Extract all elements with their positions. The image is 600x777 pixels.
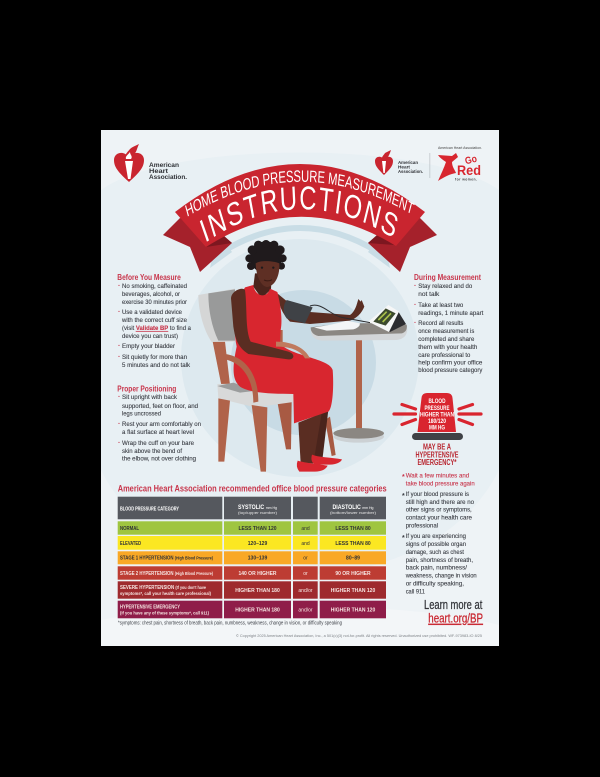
- table header row: (bottom/lower number): [330, 510, 377, 515]
- text block: emergency steps: pain, shortness of breath,: [406, 557, 473, 564]
- bullet list: during measurement: ·: [414, 302, 416, 309]
- call to action: learn more: [424, 598, 483, 626]
- neck and head: [253, 273, 272, 298]
- siren text: HIGHER THAN: [420, 411, 454, 418]
- logo: Go Red for Women: American Heart Association.: [438, 146, 482, 150]
- text block: during measurement: [414, 273, 484, 374]
- copyright line: © Copyright 2025 American Heart Association, Inc., a 501(c)(3) not-for-profit. All rights reserved. Unauthorized use prohibited. WF-973983-IO 8/25: [236, 634, 482, 638]
- bullet list: during measurement: ·: [414, 320, 416, 327]
- row: stage 1 hypertension: [118, 551, 386, 564]
- bullet list: during measurement: care professional to: [418, 352, 471, 359]
- row: elevated: and: [301, 541, 310, 547]
- text block: emergency steps: take blood pressure again: [406, 480, 475, 487]
- siren rays: [394, 404, 481, 424]
- bullet list: during measurement: not talk: [418, 291, 440, 298]
- bullet list: during measurement: readings, 1 minute apart: [418, 310, 484, 317]
- far arm: [277, 293, 364, 324]
- row: stage 2 hypertension: 140 OR HIGHER: [238, 571, 277, 577]
- logo: Go Red for Women: Red: [457, 163, 481, 178]
- row: normal: and: [301, 526, 310, 532]
- bullet list: proper positioning: skin above the bend of: [122, 448, 182, 455]
- table header row: DIASTOLIC mm Hg: [332, 505, 374, 511]
- logo: American Heart Association: American: [149, 162, 179, 169]
- banner body: [175, 164, 425, 247]
- row: severe hypertension: and/or: [298, 588, 313, 594]
- bullet list: proper positioning: a flat surface at heart level: [122, 429, 194, 436]
- text block: emergency steps: [402, 472, 477, 595]
- text block: emergency steps: signs of possible organ: [406, 541, 466, 548]
- callout: may be a hypertensive emergency: HYPERTENSIVE: [416, 450, 459, 459]
- bullet list: proper positioning: Wrap the cuff on your bare: [122, 440, 194, 447]
- heading: proper positioning: Proper Positioning: [117, 385, 176, 394]
- bullet list: before you measure: exercise 30 minutes prior: [122, 299, 188, 306]
- row: severe hypertension: symptoms*, call your health care professional): [120, 591, 212, 596]
- row: normal: LESS THAN 120: [238, 526, 277, 532]
- text block: emergency steps: professional: [406, 523, 438, 530]
- row: hypertensive emergency: HIGHER THAN 120: [331, 608, 375, 614]
- text block: emergency steps: *: [402, 493, 405, 500]
- bullet list: before you measure: ·: [118, 343, 120, 350]
- text block: emergency steps: If your blood pressure is: [406, 491, 469, 498]
- text block: emergency steps: damage, such as chest: [406, 549, 464, 556]
- row: elevated: LESS THAN 80: [335, 541, 371, 547]
- text block: emergency steps: back pain, numbness/: [406, 565, 467, 572]
- siren text: PRESSURE: [424, 405, 450, 412]
- bullet list: during measurement: Stay relaxed and do: [418, 283, 473, 290]
- row: elevated: ELEVATED: [120, 541, 141, 547]
- bullet list: before you measure: Empty your bladder: [122, 343, 176, 350]
- blood pressure monitor: [368, 305, 406, 332]
- logo: Go Red for Women: [430, 146, 482, 182]
- text block: emergency steps: call 911: [406, 588, 425, 595]
- row: hypertensive emergency: (If you have any of these symptoms*, call 911): [120, 610, 210, 615]
- row: normal: NORMAL: [120, 526, 139, 532]
- row: severe hypertension: HIGHER THAN 180: [235, 588, 280, 594]
- banner subtitle: HOME BLOOD PRESSURE MEASUREMENT: [185, 170, 415, 216]
- text block: emergency steps: or difficulty speaking,: [406, 580, 464, 587]
- table header row: [118, 497, 386, 519]
- bullet list: during measurement: once measurement is: [418, 328, 474, 335]
- bullet list: proper positioning: ·: [118, 421, 120, 428]
- bullet list: during measurement: completed and share: [418, 336, 475, 343]
- text block: before you measure: [117, 273, 191, 369]
- banner tails: [163, 218, 437, 272]
- siren dome: [418, 393, 456, 432]
- bullet list: proper positioning: supported, feet on floor, and: [122, 403, 198, 410]
- table heading: American Heart Association recommended office blood pressure categories: [118, 484, 387, 495]
- dress: [234, 285, 333, 423]
- table header row: (top/upper number): [238, 510, 278, 515]
- siren text: MM HG: [429, 424, 445, 431]
- row: stage 1 hypertension: STAGE 1 HYPERTENSION (High Blood Pressure): [120, 556, 214, 562]
- chair: [198, 289, 336, 472]
- illustration: seated woman measuring blood pressure: [198, 240, 407, 472]
- row: stage 2 hypertension: or: [303, 571, 308, 577]
- row: severe hypertension: [118, 581, 386, 599]
- heading: during measurement: During Measurement: [414, 273, 481, 282]
- row: stage 2 hypertension: 90 OR HIGHER: [335, 571, 371, 577]
- bullet list: proper positioning: the elbow, not over clothing: [122, 456, 196, 462]
- text block: emergency steps: If you are experiencing: [406, 533, 466, 540]
- bullet list: before you measure: device you can trust): [122, 333, 178, 340]
- row: hypertensive emergency: and/or: [298, 608, 313, 614]
- logo: American Heart Association small: Association.: [398, 169, 423, 174]
- table header row: BLOOD PRESSURE CATEGORY: [120, 506, 179, 512]
- text block: emergency steps: *: [402, 474, 405, 481]
- logo: Go Red for Women: Go: [464, 154, 478, 167]
- poster panel: [101, 130, 499, 646]
- bullet list: before you measure: ·: [118, 354, 120, 361]
- text block: emergency steps: contact your health care: [406, 515, 472, 522]
- text block: emergency steps: weakness, change in vision: [405, 573, 477, 580]
- row: normal: [118, 521, 386, 535]
- siren text: BLOOD: [428, 398, 446, 405]
- row: normal: LESS THAN 80: [335, 526, 371, 532]
- title banner: [163, 164, 437, 272]
- row: stage 2 hypertension: [118, 566, 386, 580]
- bullet list: proper positioning: ·: [118, 440, 120, 447]
- callout: may be a hypertensive emergency: MAY BE A: [423, 442, 451, 452]
- bullet list: before you measure: with the correct cuff size: [121, 317, 187, 324]
- bullet list: proper positioning: Sit upright with back: [122, 394, 178, 401]
- bullet list: before you measure: Use a validated device: [122, 309, 182, 316]
- bullet list: during measurement: ·: [414, 283, 416, 290]
- banner title: INSTRUCTIONS: [200, 186, 398, 242]
- backdrop circle: [231, 290, 376, 435]
- blood pressure category table: [118, 497, 386, 618]
- near arm: [231, 289, 293, 359]
- bullet list: during measurement: help confirm your office: [418, 360, 483, 366]
- row: stage 2 hypertension: STAGE 2 HYPERTENSION (High Blood Pressure): [120, 571, 214, 577]
- bullet list: before you measure: beverages, alcohol, or: [122, 291, 181, 298]
- cuff and tube: [284, 300, 313, 323]
- row: stage 1 hypertension: 130–139: [248, 556, 267, 562]
- text block: proper positioning: [117, 385, 201, 462]
- bullet list: before you measure: (visit Validate BP to find a: [122, 325, 191, 332]
- bullet list: before you measure: ·: [118, 309, 120, 316]
- logo: American Heart Association: Heart: [149, 168, 169, 175]
- legs and shoes: [313, 410, 328, 457]
- text block: emergency steps: Wait a few minutes and: [406, 472, 470, 479]
- hair: [245, 240, 287, 273]
- call to action: learn more: Learn more at: [424, 598, 483, 612]
- bullet list: proper positioning: Rest your arm comfortably on: [122, 421, 201, 428]
- siren base: [412, 433, 463, 440]
- bullet list: proper positioning: [118, 394, 201, 462]
- bullet list: during measurement: Record all results: [418, 320, 463, 327]
- call to action: learn more: heart.org/BP: [428, 612, 483, 626]
- bullet list: before you measure: Sit quietly for more than: [122, 354, 187, 361]
- bullet list: before you measure: No smoking, caffeinated: [122, 283, 187, 290]
- row: hypertensive emergency: HIGHER THAN 180: [235, 608, 280, 614]
- bullet list: before you measure: [118, 283, 191, 369]
- bullet list: during measurement: [414, 283, 484, 374]
- face: [256, 261, 279, 287]
- siren text: 180/120: [428, 418, 446, 425]
- logo: Go Red for Women: for women.: [455, 178, 477, 182]
- row: elevated: [118, 536, 386, 550]
- bullet list: proper positioning: legs uncrossed: [122, 410, 161, 418]
- callout: may be a hypertensive emergency: [416, 442, 459, 467]
- table header row: SYSTOLIC mm Hg: [238, 505, 277, 511]
- callout: may be a hypertensive emergency: EMERGENCY*: [418, 458, 457, 467]
- row: hypertensive emergency: [118, 601, 386, 618]
- table: [311, 321, 407, 443]
- text block: emergency steps: still high and there are no: [406, 499, 474, 506]
- row: hypertensive emergency: HYPERTENSIVE EMERGENCY: [120, 604, 181, 610]
- text block: emergency steps: *: [402, 535, 405, 542]
- logo: American Heart Association: Association.: [149, 174, 187, 181]
- logo: American Heart Association small: [375, 150, 423, 175]
- bullet list: before you measure: 5 minutes and do not talk: [122, 362, 191, 369]
- heading: before you measure: Before You Measure: [117, 273, 181, 282]
- logo: American Heart Association small: Heart: [398, 164, 411, 170]
- row: elevated: 120–129: [248, 541, 267, 547]
- bullet list: during measurement: Take at least two: [418, 302, 464, 309]
- logo: American Heart Association small: American: [398, 160, 418, 165]
- row: stage 1 hypertension: or: [303, 556, 308, 562]
- footnote: symptoms: *symptoms: chest pain, shortness of breath, back pain, numbness, weakness, change in vision, or difficulty speaking: [118, 620, 342, 626]
- bullet list: before you measure: ·: [118, 283, 120, 290]
- bullet list: during measurement: blood pressure category: [418, 367, 483, 374]
- armrest: [276, 342, 310, 358]
- woman: [225, 240, 370, 472]
- bullet list: during measurement: them with your health: [418, 344, 478, 351]
- siren text: [420, 398, 454, 431]
- row: stage 1 hypertension: 80–89: [346, 556, 360, 562]
- bullet list: proper positioning: ·: [118, 394, 120, 401]
- row: severe hypertension: SEVERE HYPERTENSION (If you don't have: [120, 585, 207, 591]
- row: severe hypertension: HIGHER THAN 120: [331, 588, 375, 594]
- icon: emergency siren: [394, 393, 481, 440]
- logo: American Heart Association: [114, 144, 187, 182]
- text block: emergency steps: other signs or symptoms,: [406, 507, 472, 514]
